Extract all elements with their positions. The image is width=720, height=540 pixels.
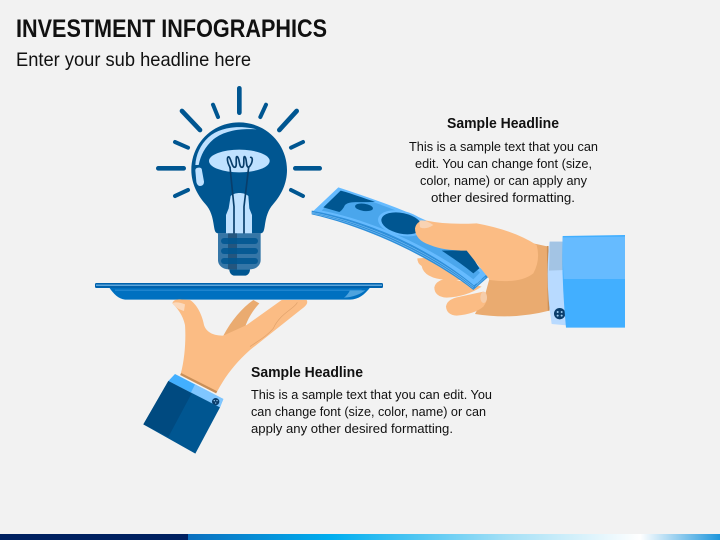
upper body text: edit. You can change font (size, <box>415 156 592 171</box>
filament wires <box>227 157 252 233</box>
tray rim <box>95 283 383 288</box>
subtitle: Enter your sub headline here <box>16 49 251 71</box>
wrist edge <box>548 246 549 311</box>
lower body text: This is a sample text that you can edit. You <box>251 387 492 402</box>
bulb rays <box>158 88 320 196</box>
right hand holding banknotes <box>312 187 625 328</box>
cuff button <box>554 308 565 319</box>
lower body text: apply any other desired formatting. <box>251 421 453 436</box>
banknote stack <box>312 211 489 290</box>
banknote dark print <box>323 191 375 212</box>
tray <box>95 283 383 300</box>
text block: lower <box>251 365 492 436</box>
upper body text: other desired formatting. <box>431 190 575 205</box>
bulb glass <box>191 122 287 233</box>
thumb behind tray <box>223 300 259 336</box>
title: INVESTMENT INFOGRAPHICS <box>16 15 327 43</box>
left hand holding tray <box>143 299 307 454</box>
upper body text: color, name) or can apply any <box>420 173 587 188</box>
fingertip highlights <box>172 302 185 311</box>
upper body text <box>409 139 598 205</box>
back of hand and thumb <box>415 221 538 281</box>
shirt cuff <box>548 242 567 325</box>
footer bar <box>0 534 720 540</box>
upper headline: Sample Headline <box>447 116 559 132</box>
tray body <box>109 288 370 300</box>
bulb highlight <box>195 127 257 165</box>
upper body text: This is a sample text that you can <box>409 139 598 154</box>
wrist and lower palm <box>475 243 549 316</box>
filament stem <box>226 193 252 233</box>
jacket sleeve <box>143 381 220 454</box>
top banknote <box>313 187 487 285</box>
lower headline: Sample Headline <box>251 365 363 381</box>
palm and fingers <box>172 299 307 392</box>
text block: upper right <box>409 116 598 205</box>
jacket sleeve <box>562 235 625 328</box>
cuff button <box>212 398 219 405</box>
bulb glow ellipse <box>209 150 270 172</box>
lower body text: can change font (size, color, name) or can <box>251 404 486 419</box>
wrist shadow <box>181 374 217 392</box>
shirt cuff <box>168 374 223 407</box>
lower body text <box>251 387 492 436</box>
bulb screw base <box>218 233 261 269</box>
lower fingers <box>417 257 473 280</box>
icon: light bulb with rays <box>158 88 320 276</box>
